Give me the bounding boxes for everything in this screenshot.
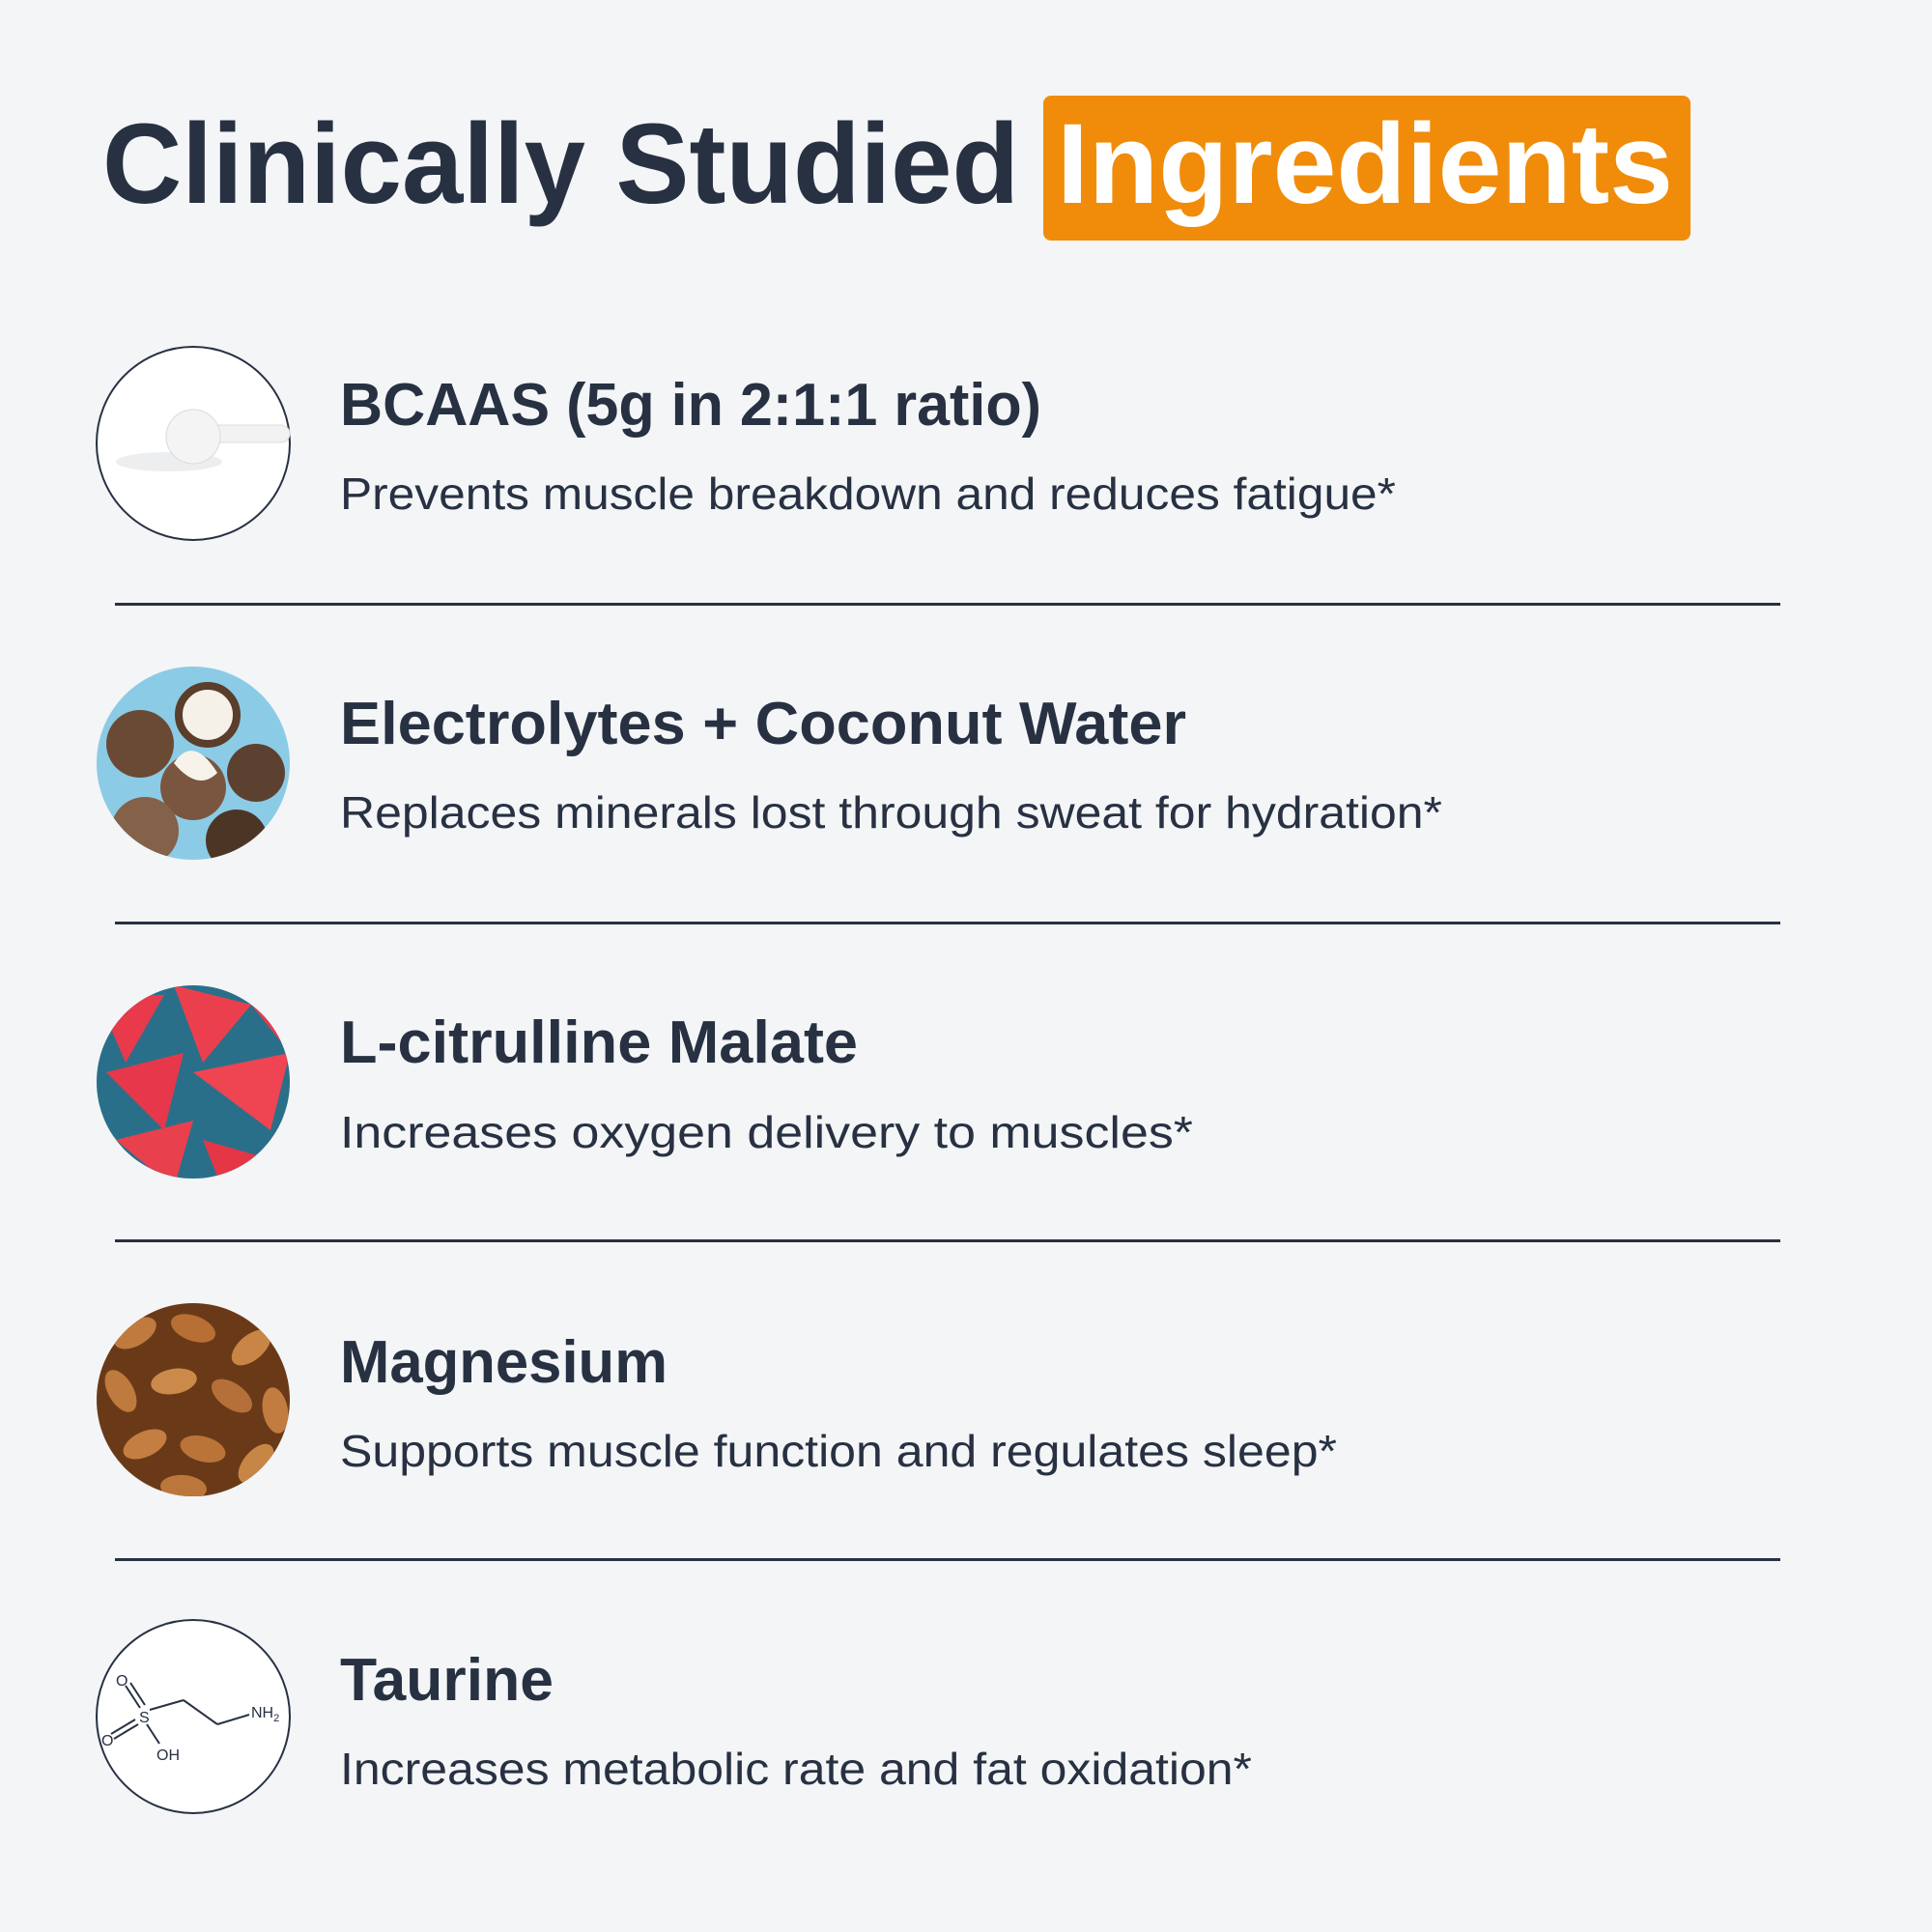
title highlight box: Ingredients bbox=[1057, 100, 1673, 228]
heading: Electrolytes + Coconut Water bbox=[340, 691, 1186, 757]
description: Supports muscle function and regulates sleep* bbox=[340, 1426, 1337, 1476]
row: Electrolytes bbox=[97, 667, 1442, 871]
icon: coconuts bbox=[97, 667, 290, 871]
description: Prevents muscle breakdown and reduces fatigue* bbox=[340, 469, 1396, 519]
row: BCAAS bbox=[97, 347, 1396, 540]
icon: taurine molecule: 2 bbox=[273, 1713, 279, 1724]
description: Replaces minerals lost through sweat for hydration* bbox=[340, 787, 1442, 838]
icon: taurine molecule: OH bbox=[156, 1747, 180, 1764]
icon: taurine molecule: S bbox=[139, 1710, 150, 1726]
heading: BCAAS (5g in 2:1:1 ratio) bbox=[340, 372, 1041, 439]
title: Clinically Studied bbox=[102, 100, 1019, 228]
title bbox=[102, 96, 1690, 241]
icon: powder scoop bbox=[97, 347, 290, 540]
row: Taurine bbox=[97, 1620, 1252, 1813]
icon: taurine molecule: O bbox=[116, 1673, 128, 1690]
description: Increases metabolic rate and fat oxidation* bbox=[340, 1744, 1252, 1794]
description: Increases oxygen delivery to muscles* bbox=[340, 1107, 1193, 1157]
heading: Taurine bbox=[340, 1647, 554, 1714]
icon: taurine molecule: NH bbox=[251, 1705, 273, 1721]
icon: watermelon bbox=[97, 985, 290, 1188]
heading: L-citrulline Malate bbox=[340, 1009, 858, 1076]
icon: taurine molecule bbox=[97, 1620, 290, 1813]
heading: Magnesium bbox=[340, 1329, 668, 1396]
icon: taurine molecule: O bbox=[101, 1733, 113, 1749]
row: Magnesium bbox=[97, 1303, 1337, 1502]
row: L-citrulline bbox=[97, 985, 1193, 1188]
icon: almonds bbox=[97, 1303, 292, 1502]
